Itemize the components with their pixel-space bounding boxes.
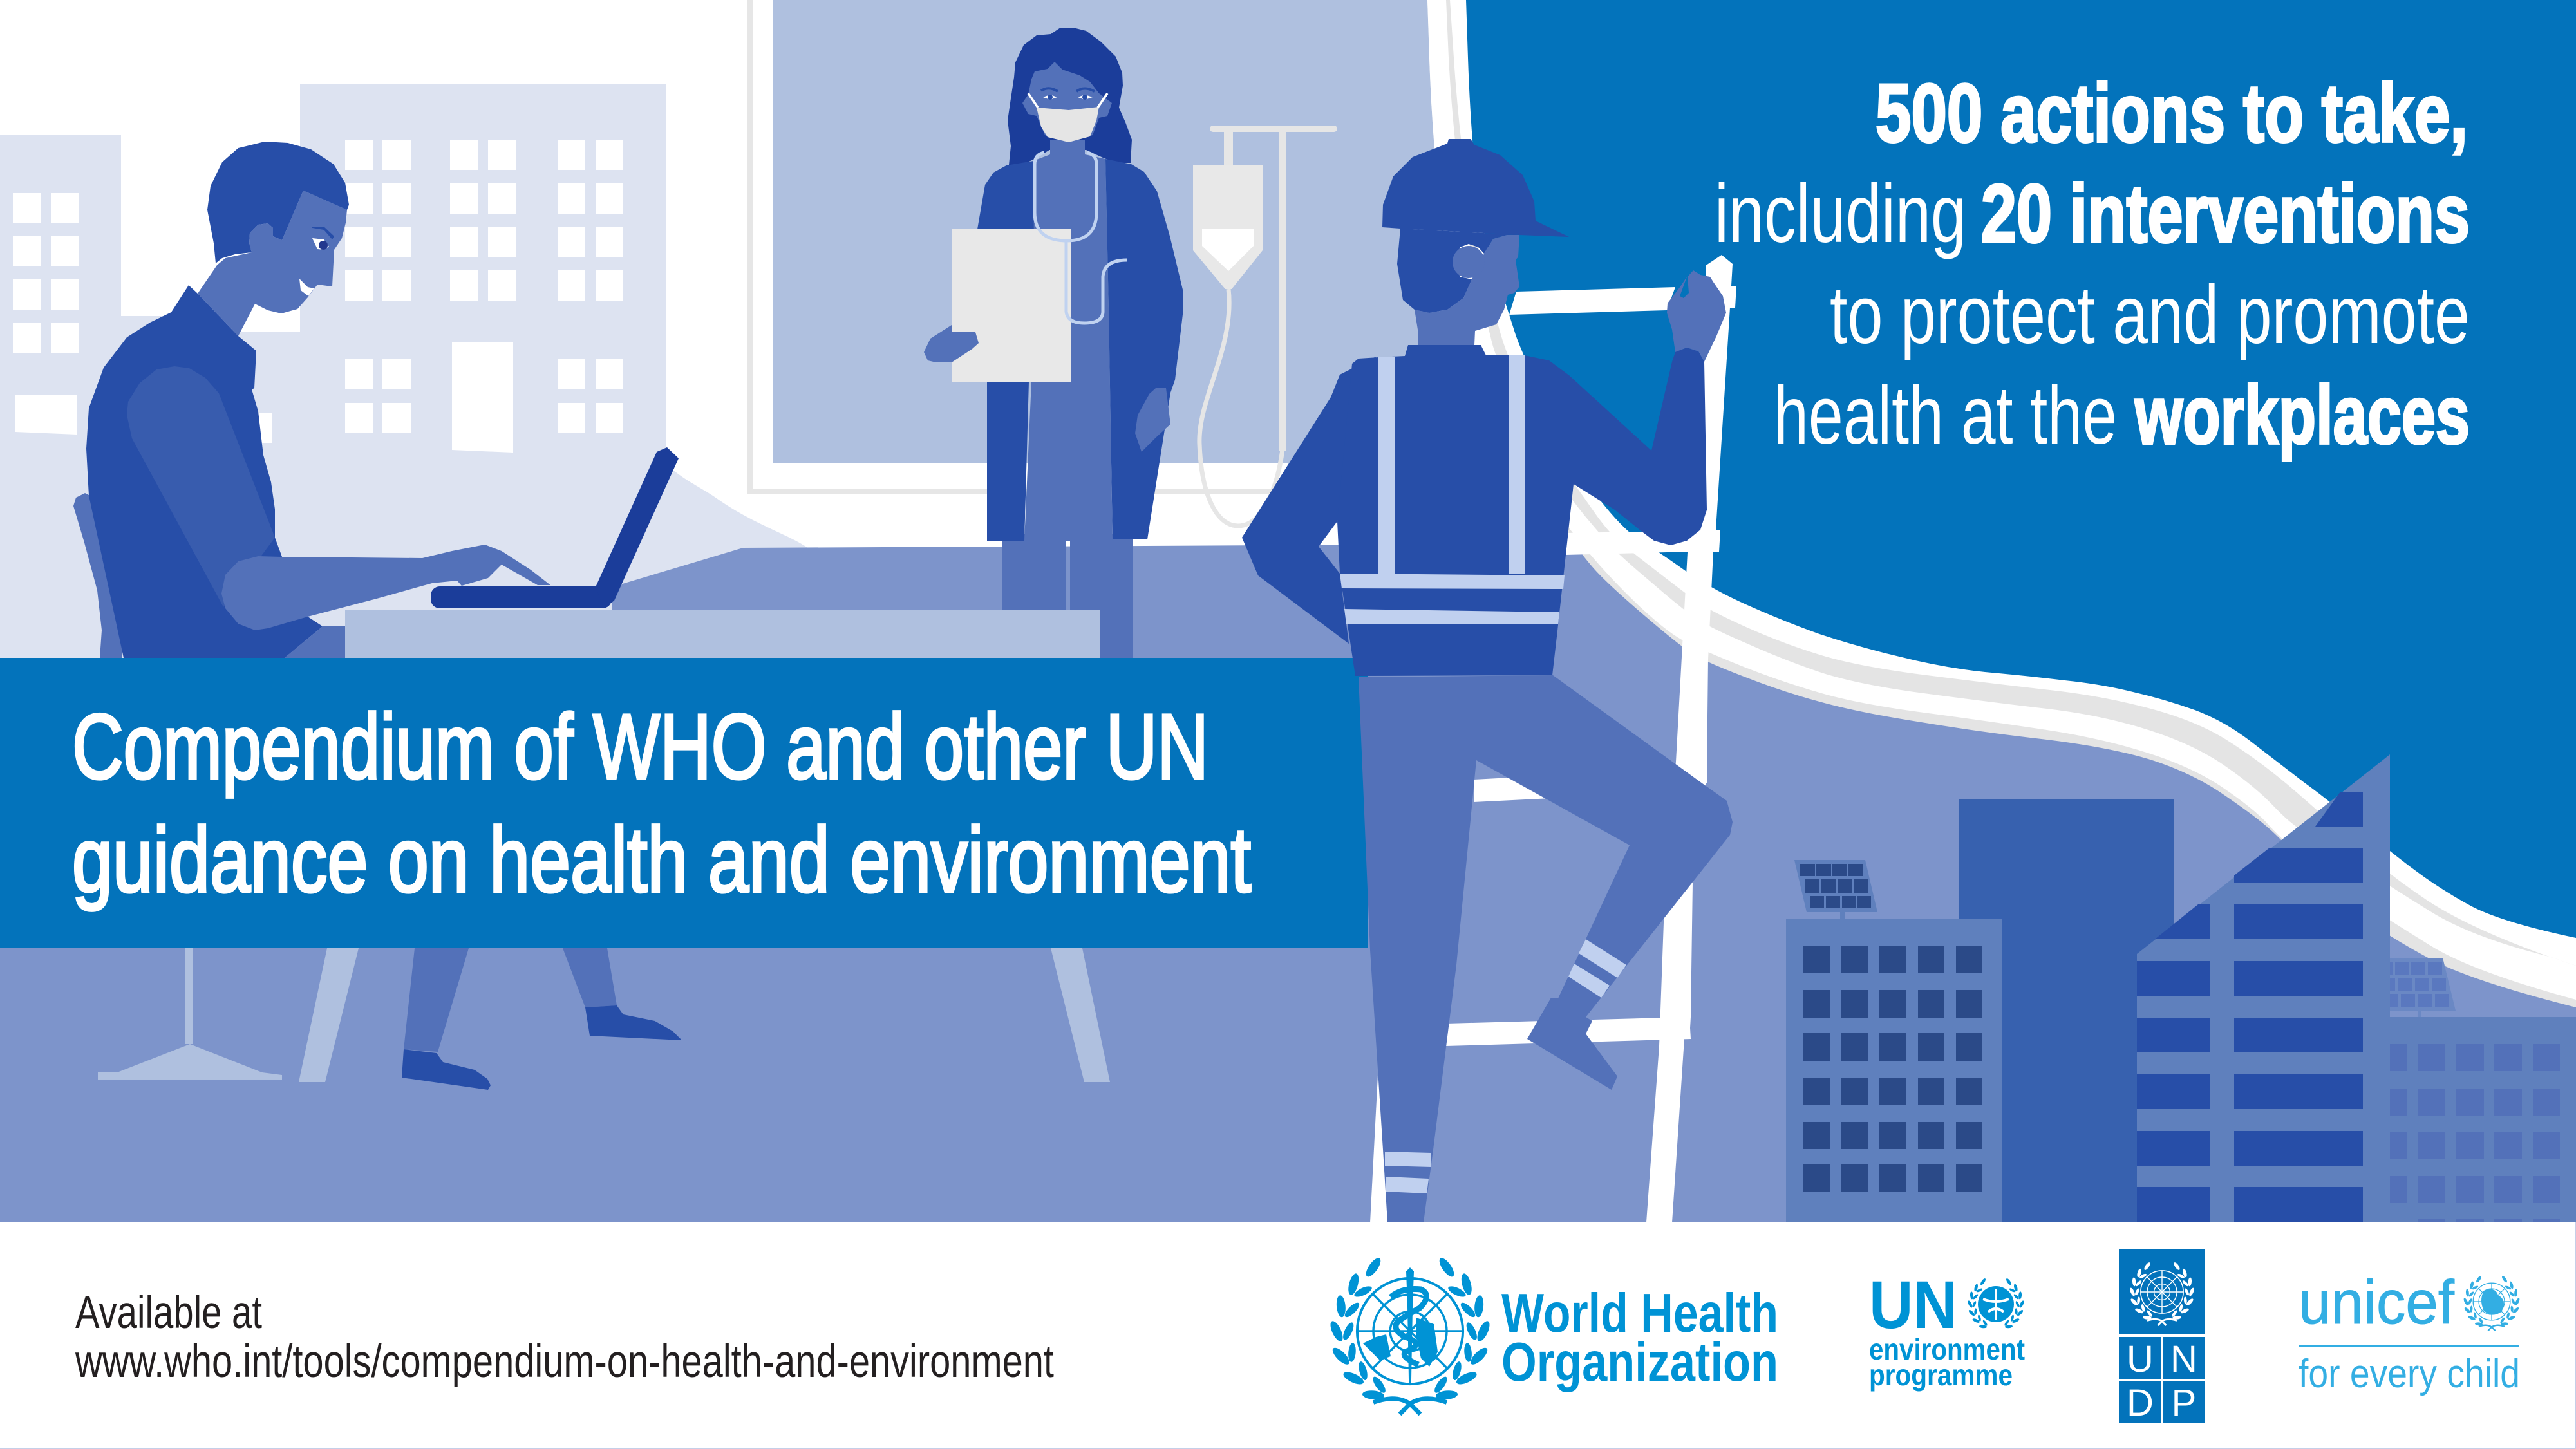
- logo: World Health Organization: World Health: [1501, 1283, 1778, 1344]
- logo: UNDP: [2119, 1249, 2205, 1424]
- neck and face: [1415, 235, 1519, 345]
- availability text: www.who.int/tools/compendium-on-health-and-environment: [75, 1336, 1054, 1387]
- cityscape behind the office: [0, 84, 809, 658]
- reflective stripes: [1340, 355, 1565, 624]
- man at laptop: [73, 142, 679, 658]
- logo: UNDP: U: [2127, 1338, 2154, 1380]
- triangular tower: [2137, 754, 2390, 1222]
- availability text: [75, 1287, 1054, 1387]
- logo: UN environment programme: [1869, 1267, 2025, 1392]
- footer band: [0, 1222, 2576, 1449]
- ladder: [1370, 255, 1736, 1222]
- face: [1022, 62, 1112, 142]
- helmet: [1382, 139, 1569, 237]
- far building: [2390, 958, 2576, 1222]
- buildings right: [1786, 754, 2576, 1222]
- logo: UNDP: D: [2127, 1382, 2154, 1424]
- logo: UNDP: P: [2172, 1382, 2196, 1424]
- torso: [86, 285, 323, 658]
- hair: [1008, 28, 1132, 165]
- banner title text: [72, 696, 1251, 911]
- hair: [207, 142, 349, 263]
- right hand: [1135, 388, 1170, 452]
- tall tower: [1959, 799, 2174, 1222]
- availability text: Available at: [75, 1287, 262, 1338]
- logo: UN environment programme: programme: [1869, 1358, 2013, 1392]
- desk: [345, 610, 1100, 658]
- hand: [1667, 270, 1726, 362]
- sock stripes: [1385, 939, 1626, 1193]
- clipboard: [952, 229, 1071, 382]
- legs: [1002, 534, 1133, 658]
- eye: [312, 227, 334, 250]
- legs: [1359, 675, 1733, 1222]
- ear: [1453, 246, 1485, 278]
- logo: UNICEF: [2299, 1268, 2521, 1396]
- man's legs: [402, 948, 682, 1090]
- blue headline panel: [1466, 0, 2576, 938]
- laptop: [431, 447, 679, 608]
- arm: [221, 545, 550, 630]
- desk legs and chair base: [98, 948, 1110, 1082]
- wave bands: [1427, 0, 2576, 1007]
- thigh: [285, 626, 345, 658]
- smile: [299, 279, 314, 296]
- eyes: [1041, 88, 1095, 100]
- blue title banner: [0, 658, 1368, 948]
- logo: World Health Organization: [1328, 1256, 1778, 1414]
- logo: UN environment programme: UN: [1869, 1267, 1957, 1343]
- left hand: [924, 325, 979, 362]
- construction worker: [1242, 139, 1733, 1222]
- vest and torso: [1337, 345, 1707, 676]
- chair back: [73, 493, 124, 658]
- banner title text: Compendium of WHO and other UN: [72, 696, 1208, 798]
- mask: [1037, 107, 1099, 142]
- hair: [1397, 229, 1519, 313]
- headline text: [1715, 68, 2470, 462]
- scrubs: [1024, 140, 1113, 541]
- headline text: health at the: [1774, 369, 2117, 462]
- logo: World Health Organization: Organization: [1501, 1332, 1778, 1393]
- logo: UNICEF: for every child: [2299, 1352, 2520, 1396]
- nurse: [924, 28, 1183, 658]
- face and neck: [198, 191, 347, 336]
- IV drip stand: [1193, 126, 1337, 526]
- left arm: [1242, 357, 1376, 644]
- hospital window: [747, 0, 1456, 494]
- sleeve: [127, 366, 275, 607]
- logo: UNICEF: unicef: [2299, 1268, 2454, 1337]
- headline text: including: [1715, 168, 1966, 260]
- floor: [0, 544, 2576, 1222]
- coat: [977, 161, 1035, 541]
- banner title text: guidance on health and environment: [72, 809, 1251, 911]
- headline text: workplaces: [2134, 369, 2470, 462]
- logo: UN environment programme: environment: [1869, 1332, 2025, 1366]
- logo: UNDP: N: [2170, 1338, 2197, 1380]
- stethoscope: [1035, 153, 1127, 323]
- office block with solar panel: [1786, 860, 2002, 1222]
